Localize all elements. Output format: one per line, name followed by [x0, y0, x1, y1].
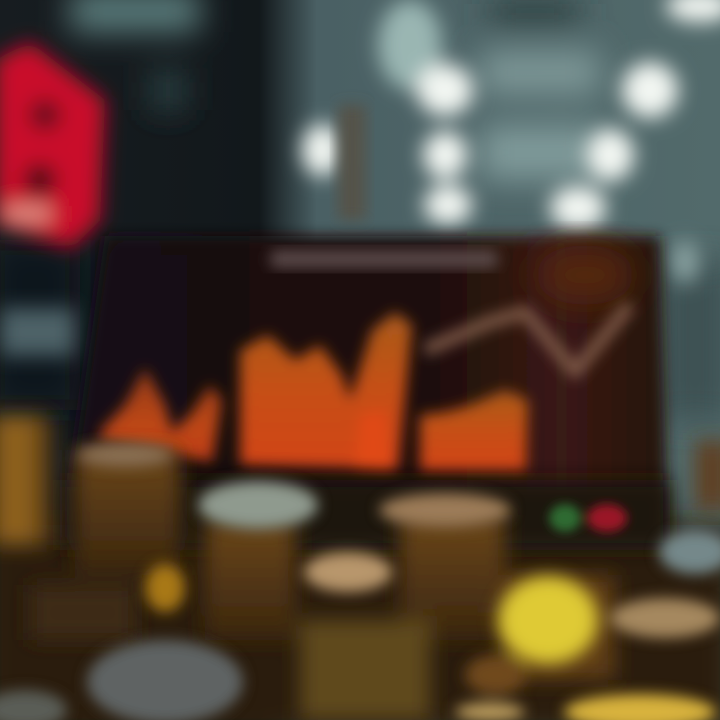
- coin: pale right: [610, 598, 720, 638]
- panel glow: brown upper right: [535, 245, 635, 305]
- coin: amber centre: [465, 655, 525, 695]
- lamp post: [338, 105, 366, 220]
- legend: green and red dots: [549, 504, 627, 532]
- coin: steel right: [659, 530, 720, 574]
- coin: amber glint: [145, 564, 185, 612]
- panel base shadow: [60, 480, 670, 550]
- coin: grey bottom: [87, 640, 243, 720]
- coin: grey-green top: [198, 481, 318, 529]
- coin: tan top: [379, 493, 511, 527]
- lights: bright tower windows: [302, 0, 720, 284]
- line chart: muted trend line: [425, 305, 630, 372]
- coin: bright yellow: [498, 576, 598, 664]
- chart panel: [70, 236, 668, 530]
- coin: yellow bottom right: [564, 694, 716, 720]
- coin: small bottom centre: [455, 703, 525, 720]
- panel title, blurred: [270, 250, 498, 268]
- coin: pale centre: [304, 552, 392, 592]
- coins: gold coin stacks: [0, 415, 720, 720]
- coin: grey bottom left: [0, 690, 67, 720]
- coin: pale top left: [77, 443, 173, 467]
- bar chart: orange bars: [100, 312, 528, 472]
- sign: red neon building: [0, 42, 105, 248]
